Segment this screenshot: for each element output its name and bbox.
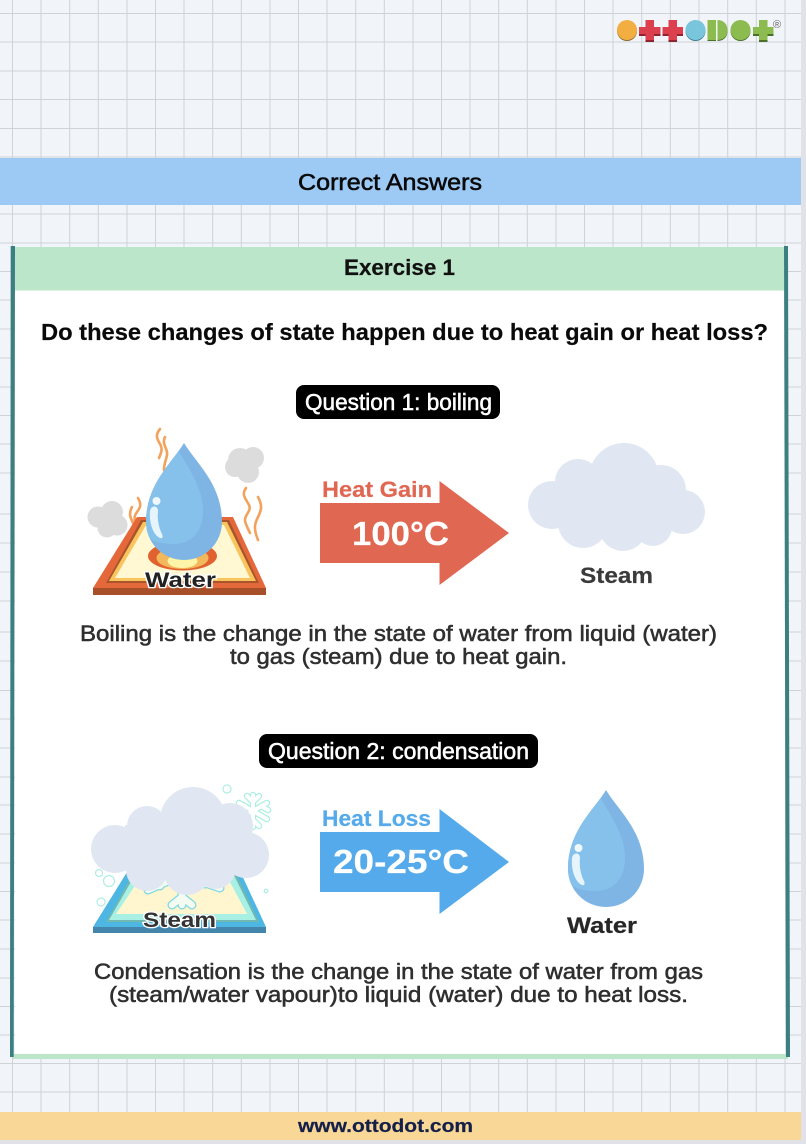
- logo: ®: [773, 19, 781, 31]
- illustration: steam on cold plate: [91, 785, 269, 933]
- label: water: Water: [567, 913, 638, 938]
- exercise heading: Exercise 1: [344, 255, 455, 280]
- snowflake on plate: [148, 870, 220, 905]
- icon: steam cloud: [528, 443, 705, 551]
- heat waves: [130, 429, 261, 540]
- condensation explanation: Condensation is the change in the state of water from gas: [94, 959, 703, 984]
- cold plate: [93, 927, 266, 933]
- boiling explanation: to gas (steam) due to heat gain.: [230, 644, 567, 669]
- illustration: water on hot plate: [88, 429, 266, 595]
- footer: www.ottodot.com: [297, 1116, 473, 1136]
- label: steam: Steam: [580, 563, 653, 588]
- arrow: heat gain: Heat Gain: [322, 477, 432, 502]
- label: water: Water: [145, 569, 216, 592]
- steam cloud: [91, 787, 269, 895]
- question 1 label: Question 1: boiling: [305, 389, 492, 415]
- panel border: left: [10, 246, 15, 1057]
- arrow: heat loss: [320, 806, 509, 914]
- boiling explanation: Boiling is the change in the state of water from liquid (water): [80, 621, 717, 646]
- arrow: heat gain: 100°C: [352, 515, 449, 552]
- arrow: heat loss: Heat Loss: [322, 806, 431, 831]
- smoke puffs: [88, 447, 264, 538]
- boiling explanation: [80, 621, 717, 669]
- panel border: right: [784, 246, 790, 1057]
- snowflake: upper right: [238, 795, 268, 827]
- exercise heading: [15, 247, 784, 290]
- question 2 label: Question 2: condensation: [268, 738, 529, 764]
- title banner: [0, 158, 801, 205]
- title banner: Correct Answers: [298, 169, 482, 195]
- hot plate: [93, 588, 266, 595]
- bubbles: [96, 785, 268, 906]
- condensation explanation: (steam/water vapour)to liquid (water) due to heat loss.: [109, 982, 688, 1007]
- arrow: heat loss: 20-25°C: [333, 843, 469, 880]
- footer: [0, 1112, 801, 1140]
- water drop: [140, 443, 222, 560]
- icon: water drop: [562, 790, 644, 907]
- logo: [617, 19, 781, 42]
- condensation explanation: [94, 959, 703, 1007]
- arrow: heat gain: [320, 477, 509, 585]
- panel: exercise 1: [10, 246, 790, 1059]
- instruction text: Do these changes of state happen due to heat gain or heat loss?: [41, 319, 768, 345]
- label: steam: Steam: [143, 909, 216, 932]
